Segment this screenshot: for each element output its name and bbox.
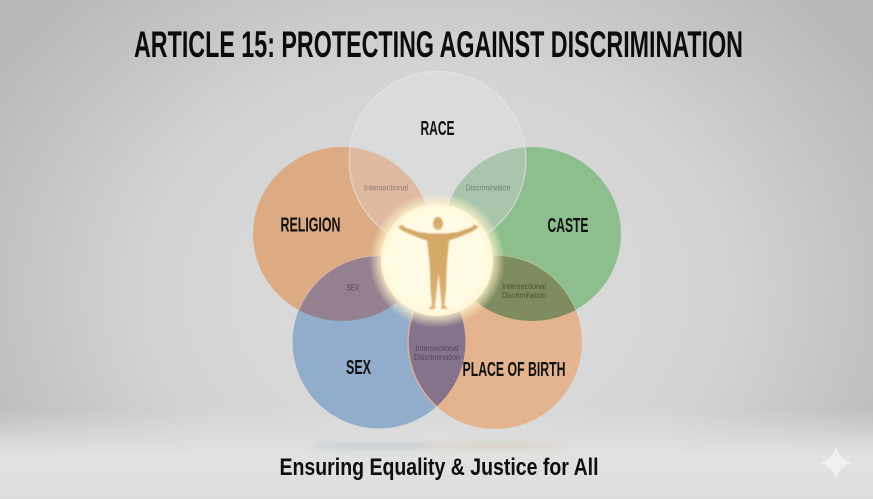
overlap: sex and place of birth bbox=[407, 310, 466, 407]
label: race: RACE bbox=[420, 118, 454, 140]
race outline bbox=[349, 72, 526, 248]
circle: race bbox=[348, 71, 526, 249]
overlap text: sex and place of birth bbox=[414, 343, 460, 362]
overlap text: sex: SEX bbox=[346, 282, 360, 292]
circle: religion bbox=[253, 147, 431, 321]
circle: place of birth bbox=[408, 255, 582, 429]
icon: sparkle bbox=[820, 446, 852, 480]
label: religion: RELIGION bbox=[280, 214, 340, 236]
overlap: race and religion bbox=[348, 148, 426, 232]
circle: caste bbox=[443, 147, 621, 321]
central glow bbox=[369, 192, 505, 328]
label: sex: SEX bbox=[346, 357, 371, 379]
overlap: caste and place of birth bbox=[476, 254, 576, 321]
overlap text: sex and place of birth: Intersectional bbox=[416, 343, 459, 353]
circle: sex bbox=[292, 256, 466, 428]
overlap text: caste and place of birth bbox=[502, 281, 546, 300]
overlap text: discrimination: Discrimination bbox=[466, 182, 511, 192]
overlap text: intersectional: Intersectional bbox=[364, 182, 408, 192]
icon: human figure with outstretched arms bbox=[398, 217, 479, 309]
overlap: race and caste bbox=[448, 147, 526, 233]
overlap text: caste and place of birth: Discrimination bbox=[502, 290, 546, 300]
venn diagram bbox=[253, 71, 621, 429]
overlap text: sex and place of birth: Discrimination bbox=[414, 352, 460, 362]
label: place of birth: PLACE OF BIRTH bbox=[462, 359, 566, 381]
overlap text: caste and place of birth: Intersectional bbox=[502, 281, 546, 291]
floor shadow bbox=[310, 444, 565, 448]
label: caste: CASTE bbox=[548, 215, 588, 237]
central circle bbox=[381, 204, 493, 316]
overlap: religion and sex bbox=[298, 255, 398, 321]
tagline: Ensuring Equality & Justice for All bbox=[280, 454, 598, 481]
